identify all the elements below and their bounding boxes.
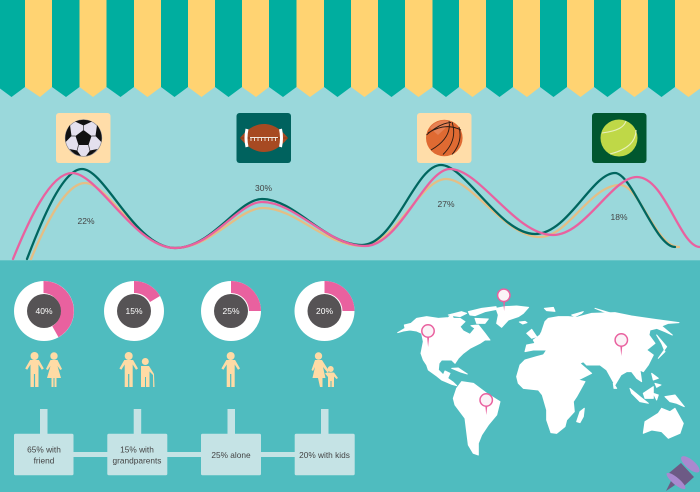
- pin: asia: [615, 334, 628, 356]
- pink curve: [13, 169, 700, 259]
- icon: tennis ball: [592, 113, 646, 163]
- icon: push pin: [665, 453, 700, 491]
- box: 20% with kids: 20% with kids: [299, 450, 350, 460]
- madagascar: [577, 408, 584, 423]
- greenland: [496, 306, 529, 327]
- box: 15% with grandparents: [107, 434, 167, 475]
- teal curve: [27, 165, 675, 259]
- donut: 15%: [104, 281, 164, 341]
- cuba: [452, 368, 467, 374]
- arctic russia islands: [572, 308, 612, 317]
- eurasia: [525, 313, 679, 385]
- box: 65% with friend: [14, 434, 74, 475]
- connectors: [40, 409, 340, 457]
- donut: 25%: [201, 281, 261, 341]
- icon: single person: [221, 352, 240, 387]
- donut: 25%: 25%: [222, 306, 240, 316]
- pin: greenland: [498, 289, 510, 311]
- icon: man and woman: [25, 352, 62, 387]
- awning stripes: [0, 0, 700, 97]
- box: 25% alone: 25% alone: [211, 450, 251, 460]
- asian islands: [613, 335, 684, 407]
- orange curve: [31, 179, 679, 259]
- chart labels: 22%: [77, 216, 95, 226]
- south america: [453, 382, 500, 455]
- donut: 15%: 15%: [125, 306, 143, 316]
- icon: basketball: [417, 113, 472, 163]
- icon: woman with child: [312, 352, 338, 387]
- map pins: [422, 289, 628, 415]
- chart labels: 30%: [255, 183, 272, 193]
- north america: [398, 314, 490, 386]
- icon: american football: [236, 113, 291, 163]
- pin: south america: [480, 394, 492, 415]
- box: 15% with grandparents: grandparents: [113, 456, 161, 466]
- box: 20% with kids: [295, 434, 355, 475]
- box: 15% with grandparents: 15% with: [120, 444, 154, 454]
- bottom panel background: [0, 260, 700, 492]
- icon: soccer ball: [56, 113, 110, 163]
- chart labels: [77, 183, 628, 226]
- box: 25% alone: [201, 434, 261, 475]
- donut: 20%: 20%: [316, 306, 333, 316]
- box: 65% with friend: 65% with: [27, 444, 61, 454]
- donut: 40%: [14, 281, 74, 341]
- africa: [517, 354, 585, 433]
- chart labels: 18%: [610, 212, 628, 222]
- arctic islands: [448, 307, 497, 323]
- donut: 40%: 40%: [35, 306, 53, 316]
- pin: north america: [422, 325, 434, 347]
- world map: [398, 306, 684, 455]
- icon: man and elder: [119, 352, 154, 387]
- chart labels: 27%: [437, 199, 455, 209]
- line chart: [13, 165, 700, 259]
- donut: 20%: [294, 281, 354, 341]
- north atlantic islands: [519, 307, 555, 338]
- australia: [643, 408, 683, 438]
- box: 65% with friend: friend: [34, 456, 55, 466]
